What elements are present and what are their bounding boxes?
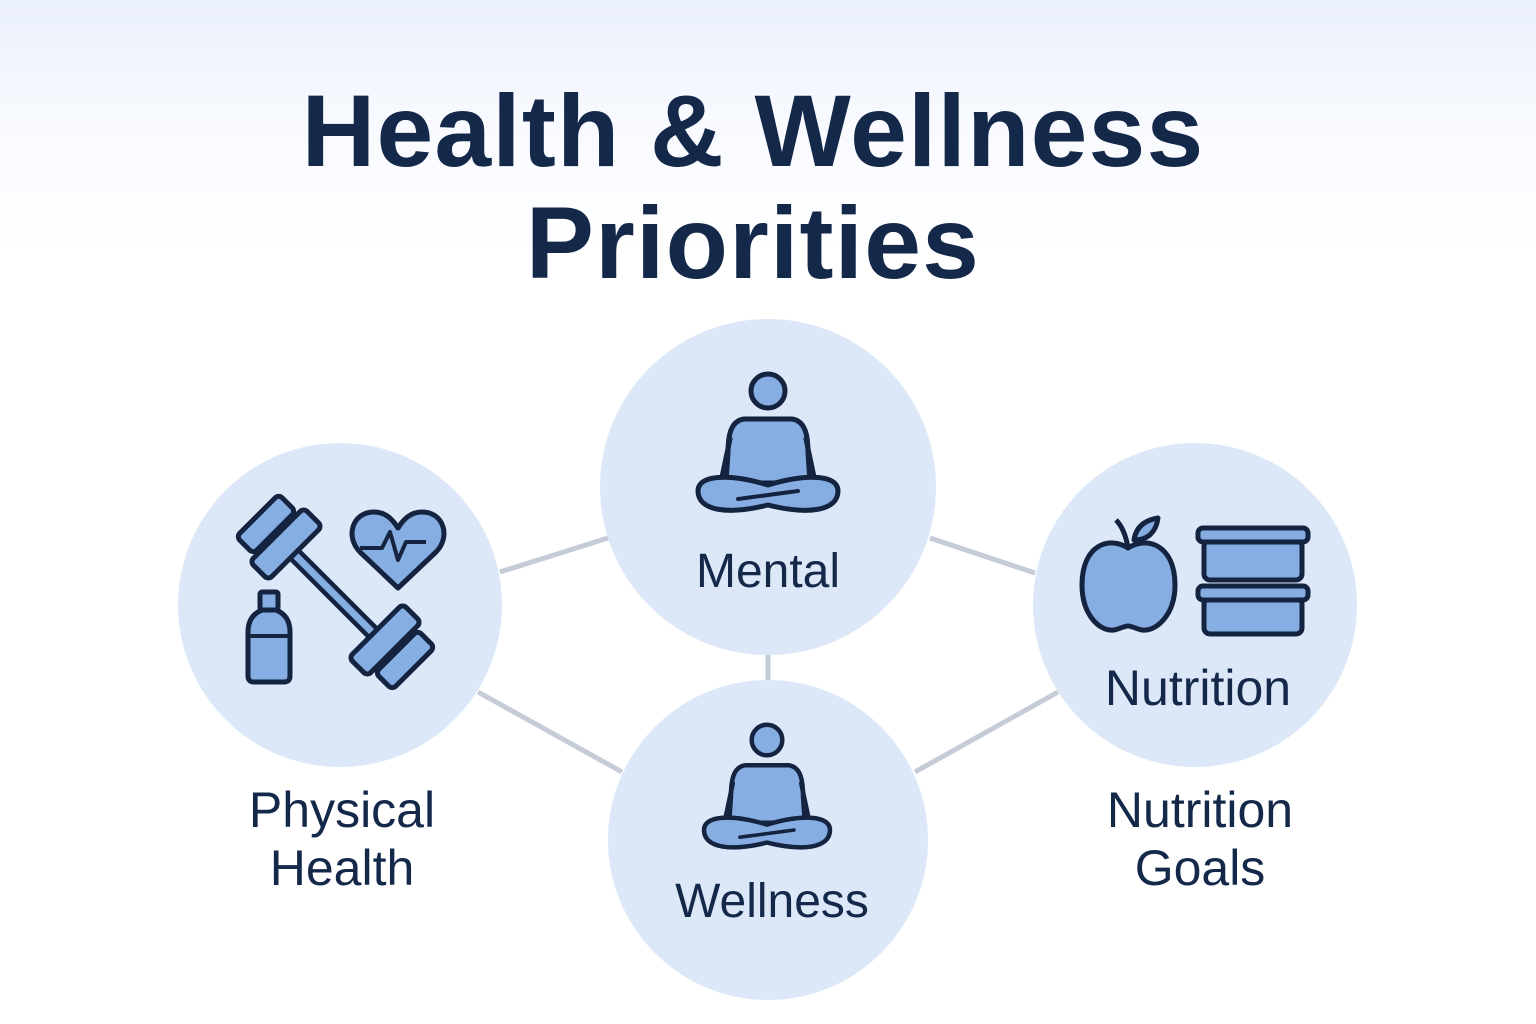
label: physical health: Physical [249, 782, 435, 838]
label: physical health [249, 782, 435, 896]
label: mental: Mental [696, 545, 840, 598]
title: Priorities [526, 186, 980, 300]
icon: meditation [698, 374, 838, 510]
icon: dumbbell, heart, bottle [236, 494, 444, 690]
label: nutrition: Nutrition [1105, 660, 1291, 716]
connector lines [478, 538, 1058, 772]
label: nutrition goals: Nutrition [1107, 782, 1293, 838]
icon: apple and containers [1082, 518, 1308, 634]
title: Health & Wellness [302, 74, 1204, 188]
panel: wellness [608, 680, 928, 1000]
panel: mental [600, 319, 936, 655]
panel: physical [178, 443, 502, 767]
title [302, 74, 1204, 300]
panel: nutrition [1033, 443, 1357, 767]
icon: meditation [704, 725, 830, 847]
label: wellness: Wellness [675, 875, 869, 928]
label: nutrition goals: Goals [1135, 840, 1265, 896]
label: physical health: Health [270, 840, 414, 896]
label: nutrition goals [1107, 782, 1293, 896]
